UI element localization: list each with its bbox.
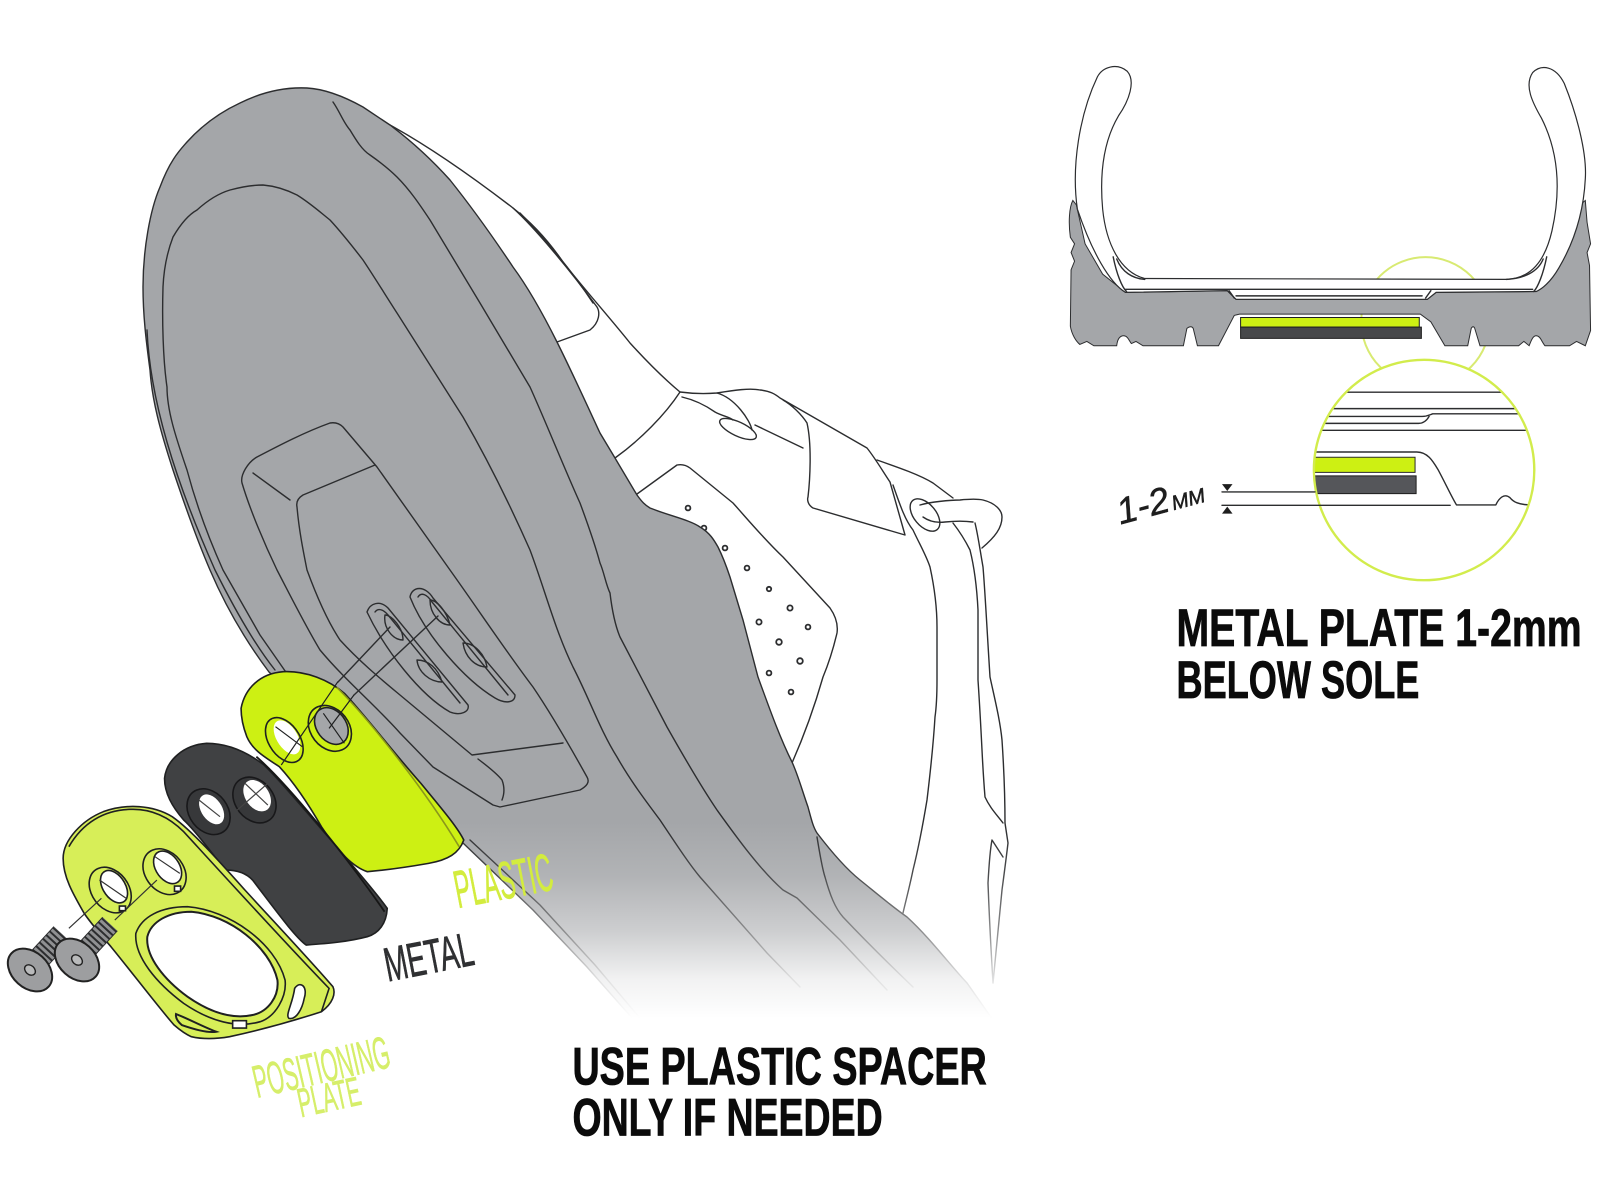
small magnifier circle [1361,257,1490,386]
screws [0,924,110,1000]
bottom fade [430,822,1030,1040]
screw 1 [0,934,62,1000]
zoomed yellow layer [1310,457,1415,472]
magnifier outline [1314,360,1534,580]
cleat slots [338,589,515,714]
screw 2 [46,924,110,990]
heading: metal plate below sole: BELOW SOLE [1177,651,1419,710]
positioning plate [63,806,334,1039]
label: metal: METAL [380,923,478,992]
label: positioning plate: PLATE [293,1068,365,1126]
exploded cleat parts [63,672,464,1039]
cross-section diagram [1069,67,1591,580]
zoomed metal layer [1310,476,1416,494]
metal plate [165,743,387,945]
perforation dots [686,506,810,694]
plastic spacer [241,672,464,872]
dark metal layer [1241,327,1421,338]
yellow spacer layer [1241,318,1419,327]
text: PLASTIC [449,843,558,920]
large magnifier circle [1310,360,1534,580]
label: 1-2mm: 1-2MM [1112,470,1209,532]
sole contour lines [147,102,913,1030]
shoe illustration [143,88,1030,1040]
dimension lines [1222,484,1450,514]
cleat recess [242,423,588,807]
sole section [1069,67,1591,346]
text: POSITIONING [248,1026,395,1108]
shoe shell [1075,67,1585,299]
shoe upper outline [390,125,1008,983]
zoomed detail [1310,392,1531,505]
gray sole [143,88,1000,1035]
heading: use plastic spacer: ONLY IF NEEDED [572,1089,883,1148]
heading: use plastic spacer: USE PLASTIC SPACER [572,1038,987,1097]
label: positioning plate [248,1026,395,1126]
gray sole profile [1069,200,1591,346]
